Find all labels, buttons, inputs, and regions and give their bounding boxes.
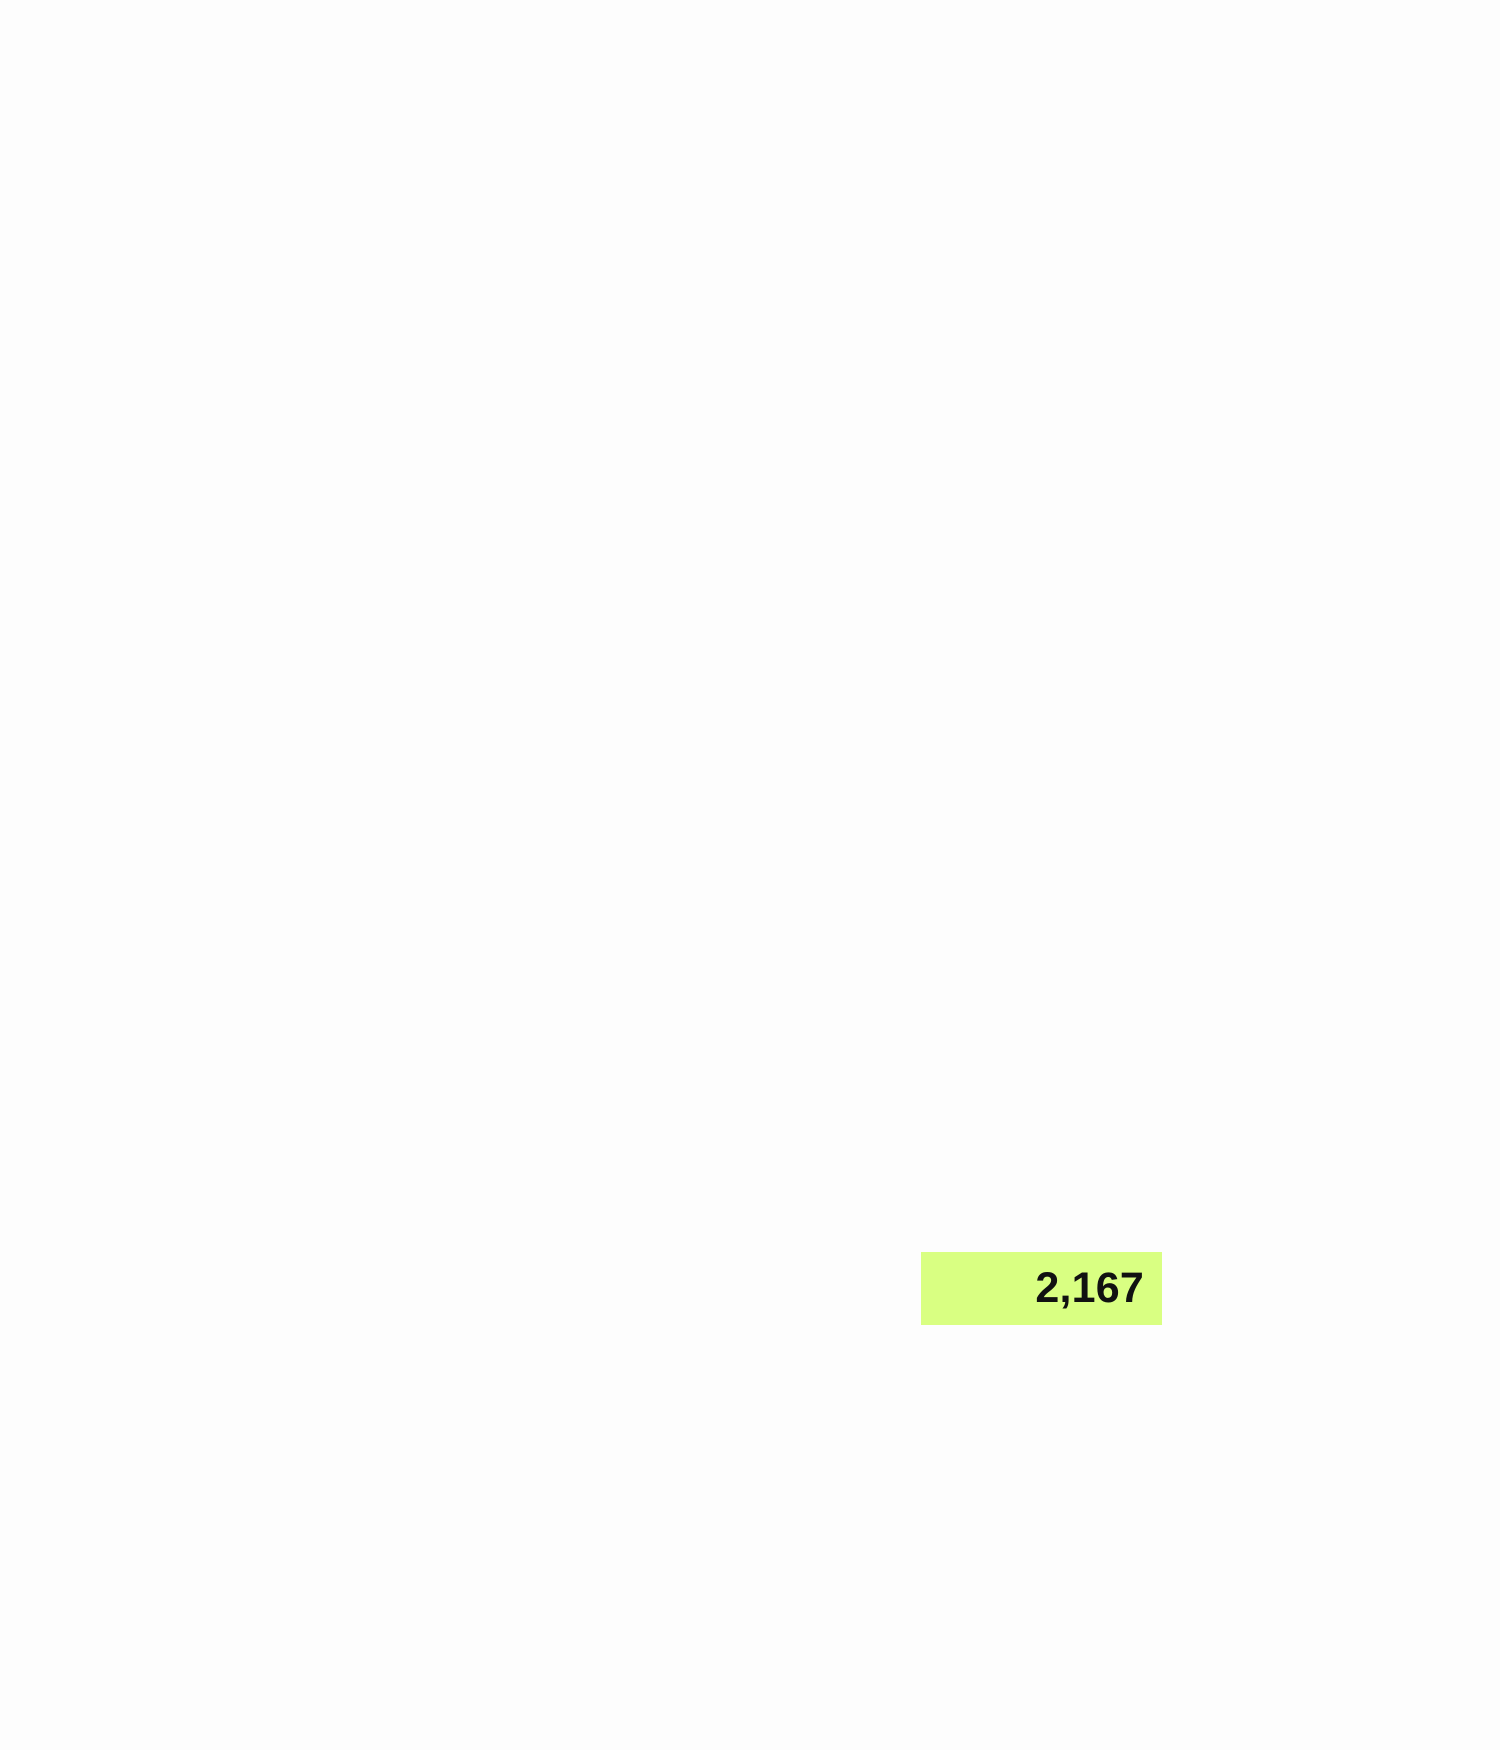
panel: highlighted value cell <box>921 1252 1162 1325</box>
text: value 2,167: 2,167 <box>1035 1264 1144 1312</box>
